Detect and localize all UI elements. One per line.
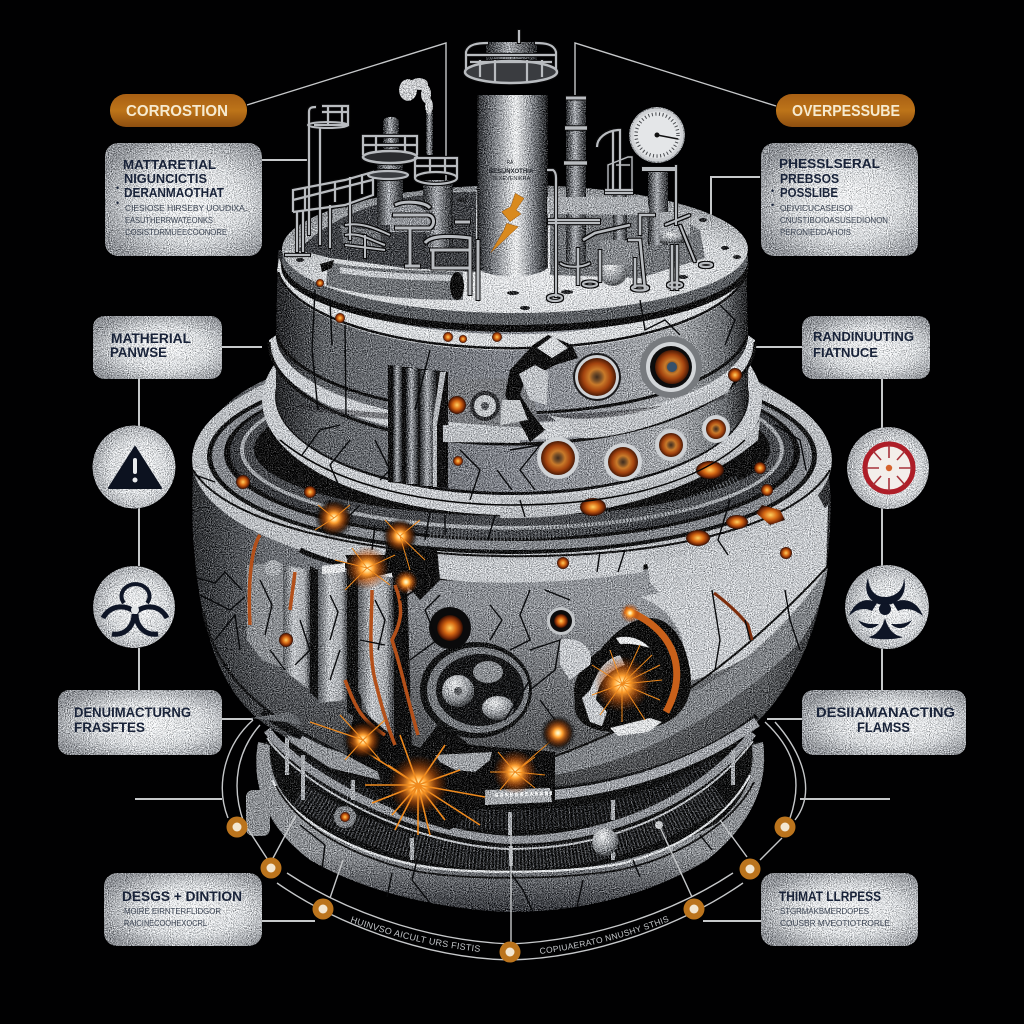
panel: material misconduct: EASUTHERRWATEONKS bbox=[125, 215, 213, 225]
equipment shadow left bbox=[298, 192, 476, 272]
panel: material failure: PANWSE bbox=[110, 345, 167, 360]
small cylinder and bolts bbox=[246, 560, 663, 856]
torn skirt plates bbox=[250, 712, 552, 805]
text: arc caption right: COPIUAERATO NNUSHY STHIS bbox=[540, 916, 668, 954]
arc caption right bbox=[540, 920, 672, 954]
panel: pressure: PHESSLSERAL bbox=[779, 156, 880, 171]
porthole upper left bbox=[573, 353, 621, 401]
top cylinder bbox=[276, 250, 748, 423]
sparks bbox=[310, 498, 662, 835]
left slabs bbox=[247, 558, 412, 750]
middle cylinder bbox=[276, 340, 748, 492]
furnace port bbox=[429, 607, 471, 649]
panel: thermal stress: THIMAT LLRPESS bbox=[779, 889, 881, 904]
curved sheet bbox=[640, 505, 828, 682]
panel: random failure: FIATNUCE bbox=[813, 345, 878, 360]
band under plate bbox=[277, 258, 748, 350]
plate bolts bbox=[296, 198, 741, 310]
plate rim bbox=[281, 200, 749, 332]
icon: biohazard right bbox=[845, 565, 929, 649]
crater bbox=[574, 618, 691, 732]
panel: thermal stress bbox=[761, 873, 918, 946]
left tower bbox=[377, 112, 453, 252]
panel: material failure: MATHERIAL bbox=[111, 331, 191, 346]
icon: lightning bolt bbox=[491, 193, 524, 253]
panel: random failure: RANDINUUTING bbox=[813, 329, 914, 344]
base skirt bbox=[256, 730, 764, 912]
portholes bbox=[429, 336, 730, 649]
column label text: BESIJNXOTHIA bbox=[489, 169, 534, 175]
equipment shadow right bbox=[550, 198, 705, 278]
arc caption left bbox=[350, 922, 481, 952]
rust streaks and cracks bbox=[195, 290, 806, 912]
gauge body bbox=[629, 107, 685, 163]
shadow under ring bbox=[300, 525, 790, 579]
column label text: RA bbox=[507, 160, 514, 166]
corrosion spots bbox=[236, 279, 792, 822]
panel: material misconduct: CIESIOSE HIRSEBY UOUDIXA, bbox=[125, 203, 247, 213]
spark small bbox=[540, 715, 576, 751]
icon: gauge bbox=[632, 110, 682, 160]
panel: pressure bbox=[761, 143, 918, 256]
smoke bbox=[399, 78, 433, 114]
column label text: TEXEVENIKRA bbox=[492, 176, 531, 182]
lower drum bbox=[192, 375, 831, 797]
panel: manufacturing flaws left: FRASFTES bbox=[74, 720, 145, 735]
furnace port right bbox=[547, 607, 575, 635]
connector lines bbox=[135, 43, 890, 921]
panel: random failure bbox=[802, 316, 930, 379]
panel: pressure: PREBSOS bbox=[780, 171, 839, 186]
lower drum shade bbox=[192, 375, 831, 797]
spark large bottom bbox=[350, 735, 485, 835]
panel: manufacturing flaws left bbox=[58, 690, 222, 755]
porthole row bbox=[537, 415, 730, 481]
icon: red wheel bbox=[847, 427, 929, 509]
badge: corrosion bbox=[110, 94, 247, 127]
panel: pressure: • bbox=[771, 200, 774, 210]
panel: pressure: OEIVICUCASEISOI bbox=[780, 203, 853, 213]
panel: thermal stress: COUSBR MVEOTIOTRORLE bbox=[780, 918, 890, 928]
burnt breach bbox=[345, 705, 555, 830]
panel: pressure: CNUSTIBOIOASUSEDIONON bbox=[780, 215, 888, 225]
badge: overpressure: OVERPESSUBE bbox=[792, 103, 900, 120]
panel: manufacturing flaws right: FLAMSS bbox=[857, 720, 910, 735]
mid pipe bbox=[613, 192, 627, 245]
spark top cluster bbox=[314, 498, 640, 623]
icon: warning triangle bbox=[92, 426, 176, 508]
panel: design and inspection: MOIRE EIRNTERFLIDGOR bbox=[124, 906, 221, 916]
panel: material misconduct: • bbox=[116, 198, 119, 208]
badge: corrosion: CORROSTION bbox=[126, 103, 228, 120]
panel: pressure: PERONIEDDAHOIS bbox=[780, 227, 851, 237]
damage upper bbox=[500, 335, 735, 442]
panel: material failure bbox=[93, 316, 222, 379]
flange one bbox=[269, 335, 755, 440]
plate bbox=[282, 185, 748, 313]
flange two bbox=[262, 285, 762, 515]
spark centre bottom bbox=[490, 740, 552, 794]
panel: material misconduct: NIGUNCICTIS bbox=[124, 171, 207, 186]
badge: overpressure bbox=[776, 94, 915, 127]
panel: pressure: • bbox=[771, 186, 774, 196]
ring segments bbox=[437, 420, 826, 600]
panel: thermal stress: STGRMAKBMERDOPES bbox=[780, 906, 869, 916]
bottom arcs bbox=[222, 720, 806, 960]
central block level two bbox=[443, 378, 540, 443]
panel: design and inspection bbox=[104, 873, 262, 946]
vertical pipe bundle bbox=[388, 365, 448, 488]
porthole upper right bbox=[640, 336, 702, 398]
right tower bbox=[566, 100, 586, 262]
equipment linework bbox=[285, 30, 712, 301]
horizontal pipe on plate bbox=[320, 260, 464, 300]
panel: design and inspection: RAICINECOOHEXOCRL bbox=[124, 918, 207, 928]
shoulder rings bbox=[192, 340, 832, 580]
lower band right bbox=[553, 566, 828, 775]
panel: design and inspection: DESGS + DINTION bbox=[122, 889, 242, 904]
torn fragments bbox=[560, 637, 662, 736]
panel: manufacturing flaws right: DESIIAMANACTING bbox=[816, 705, 955, 720]
column top cylinder bbox=[486, 42, 537, 84]
black gap top cluster bbox=[345, 543, 440, 600]
gauge stem bbox=[648, 170, 668, 245]
panel: manufacturing flaws left: DENUIMACTURNG bbox=[74, 705, 191, 720]
back pipes bbox=[547, 197, 690, 235]
column label text bbox=[489, 160, 534, 182]
spark right crater bbox=[592, 645, 662, 722]
round tanks bbox=[340, 203, 686, 286]
column bbox=[478, 95, 547, 276]
valve assembly bbox=[420, 642, 532, 738]
text: arc caption left: HUINVSO AICULT URS FISTIS bbox=[350, 916, 480, 952]
lower lip bbox=[262, 712, 757, 792]
ribbed ring bbox=[430, 480, 740, 535]
icon: biohazard left bbox=[93, 566, 175, 648]
panel: material misconduct bbox=[105, 143, 262, 256]
panel: material misconduct: • bbox=[116, 183, 119, 193]
panel: material misconduct: COSISTDRMUEECOONORE bbox=[125, 227, 227, 237]
spark upper crack bbox=[310, 715, 385, 762]
orange nodes bbox=[226, 816, 796, 962]
panel: material misconduct: DERANMAOTHAT bbox=[124, 185, 224, 200]
vessel body bbox=[192, 42, 832, 912]
panel: pressure: POSSLIBE bbox=[780, 185, 838, 200]
panel: manufacturing flaws right bbox=[802, 690, 966, 755]
panel: material misconduct: MATTARETIAL bbox=[123, 157, 216, 172]
